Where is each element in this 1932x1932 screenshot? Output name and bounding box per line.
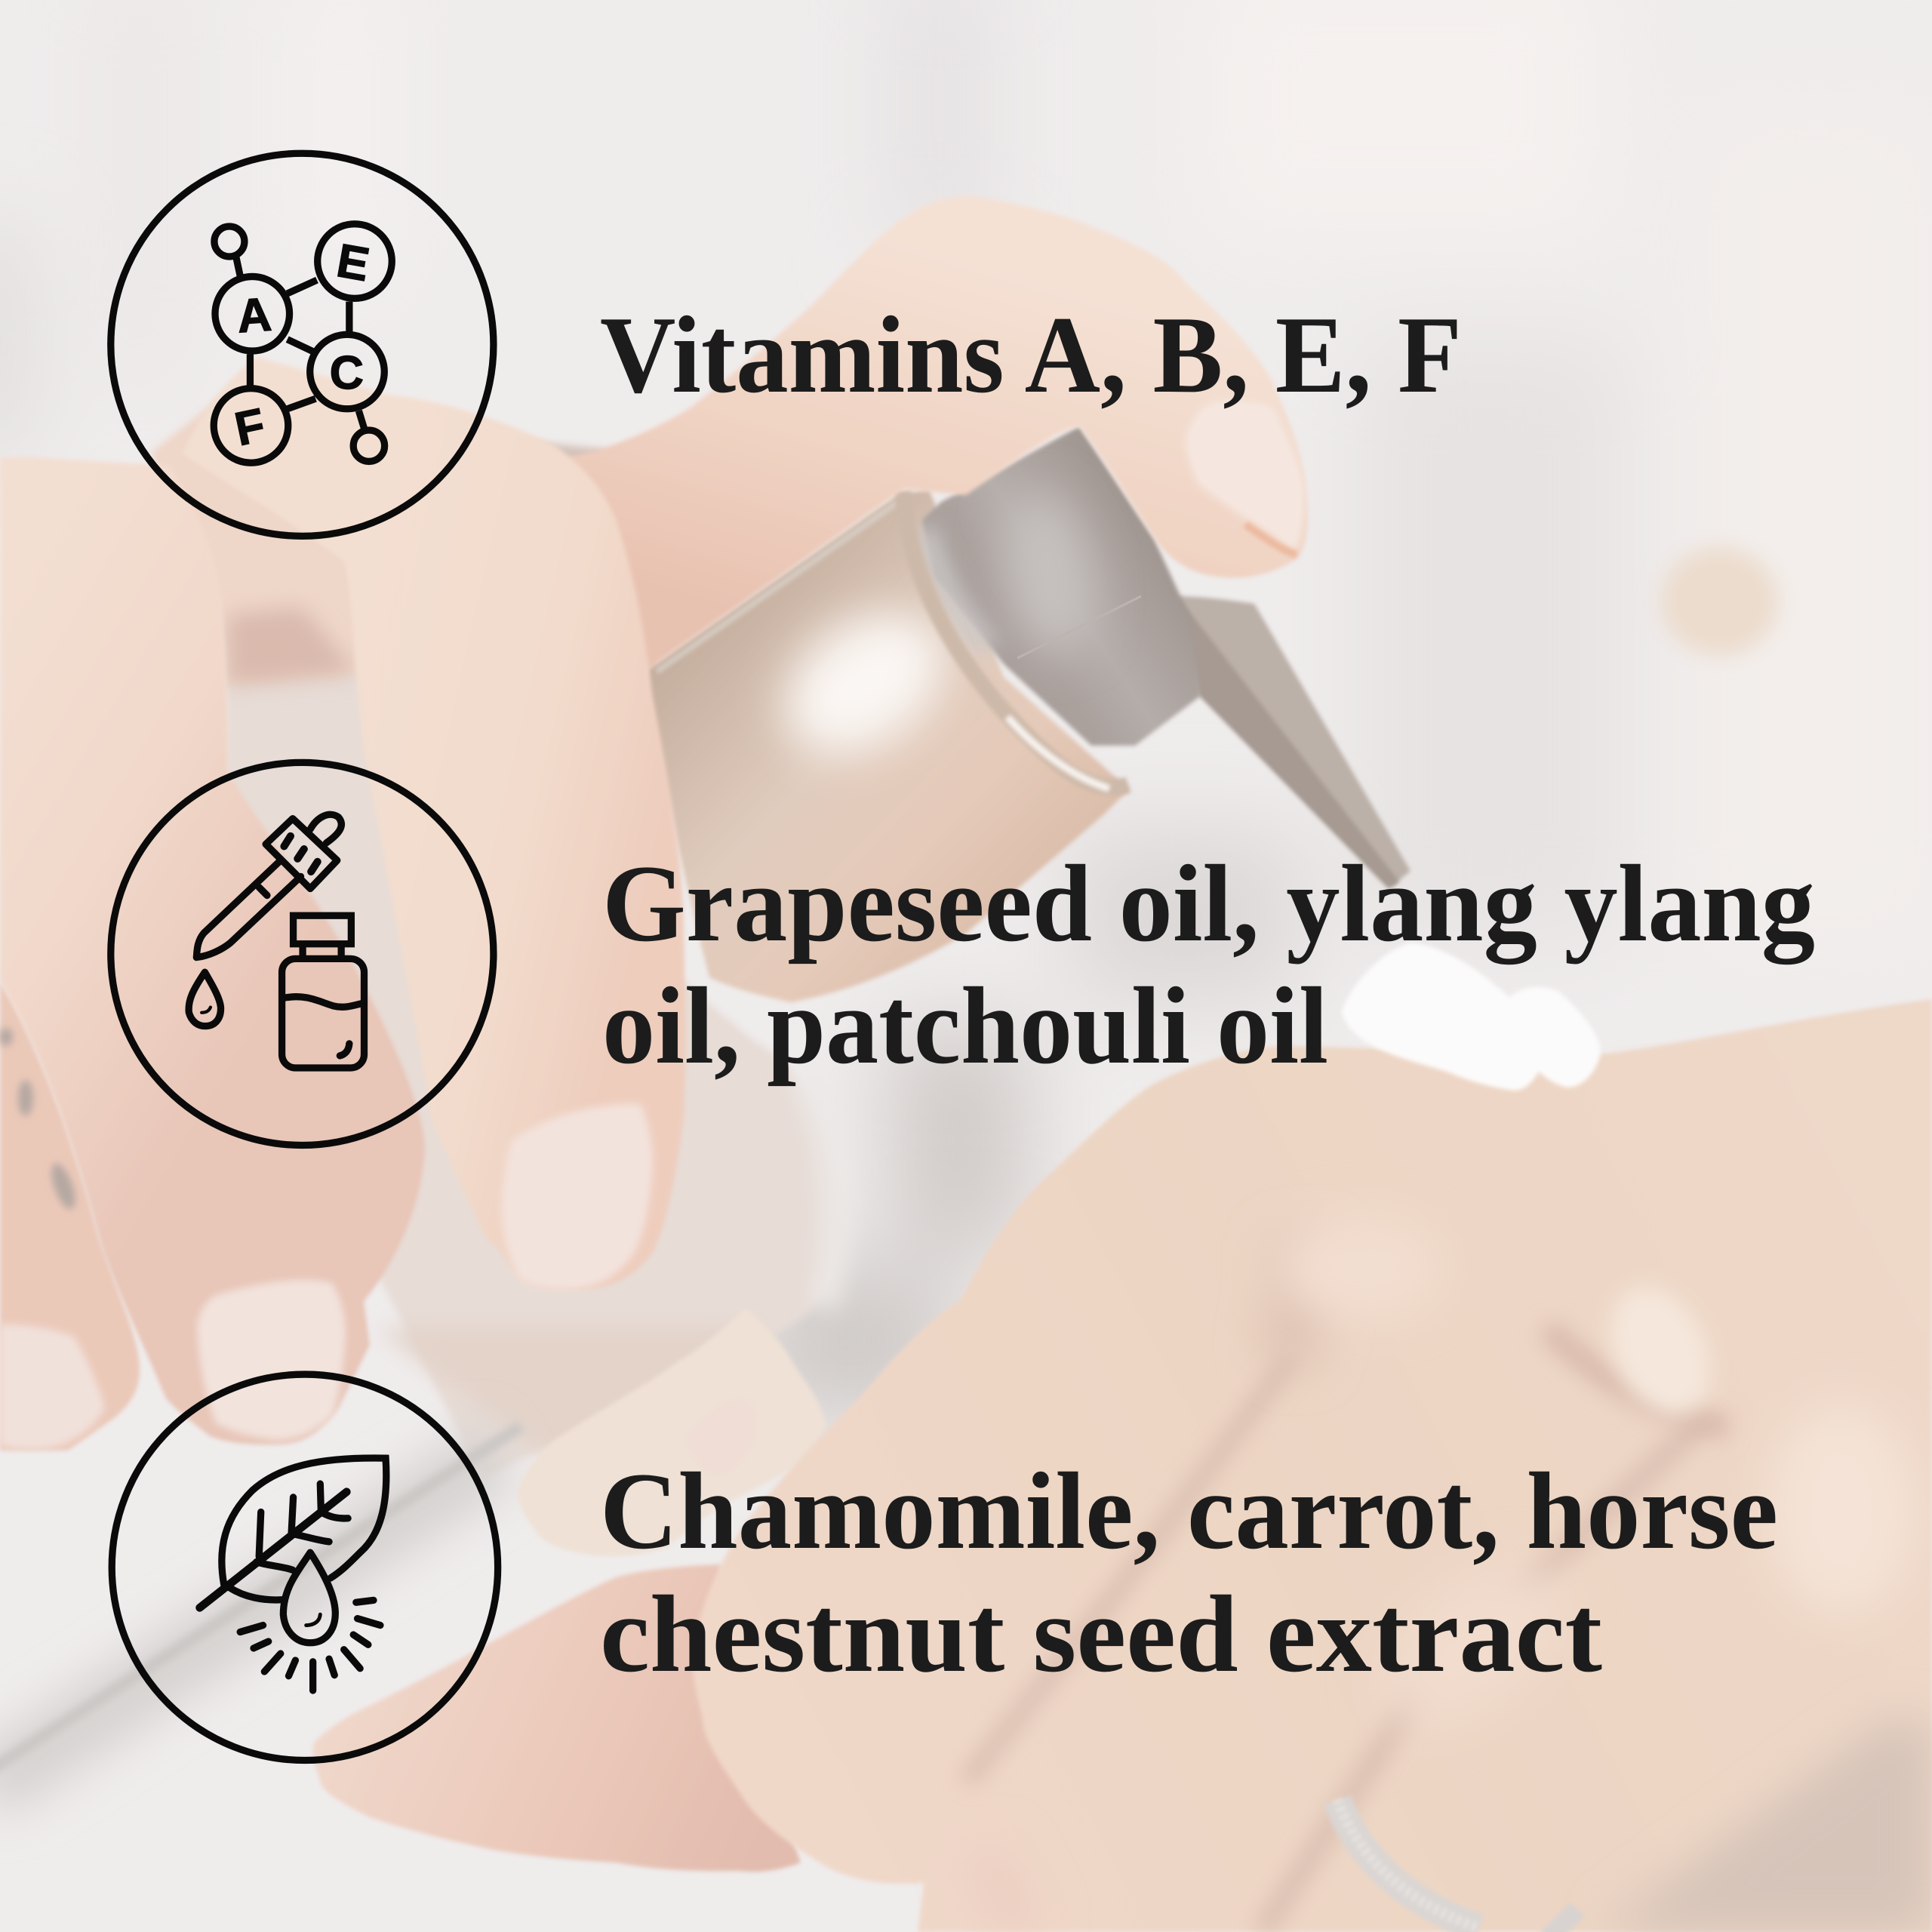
index finger — [0, 457, 425, 1444]
molecule nodes — [214, 224, 392, 463]
drop rays — [240, 1600, 380, 1690]
icon badge: vitamins molecule — [111, 153, 494, 536]
molecule letters: A — [235, 288, 273, 343]
oil bottle — [282, 915, 364, 1068]
text: oils: oil, patchouli oil — [602, 964, 1328, 1087]
middle finger — [182, 357, 685, 1290]
icon badge: dropper and oil bottle — [111, 762, 494, 1145]
oil drop — [189, 972, 221, 1026]
far left finger — [0, 981, 140, 1451]
icon badge: leaf with drop — [112, 1374, 498, 1760]
back of the receiving hand — [693, 999, 1932, 1932]
text: botanical extracts: Chamomile, carrot, horse — [600, 1450, 1778, 1572]
molecule letters: C — [330, 346, 364, 399]
pump cap — [922, 426, 1201, 746]
pen — [0, 1426, 521, 1789]
molecule letters: E — [333, 234, 373, 291]
molecule letters — [230, 234, 373, 456]
clear bottle base — [226, 664, 839, 1479]
far left nail — [0, 1324, 105, 1449]
nozzle — [1177, 596, 1411, 887]
extract drop — [283, 1552, 335, 1643]
badge ring — [112, 1374, 498, 1760]
molecule letters: F — [230, 398, 269, 456]
text: oils — [602, 842, 1815, 1087]
palm shadow — [528, 441, 657, 679]
bottle rim — [903, 491, 1128, 787]
cream — [1342, 943, 1601, 1091]
blurred shirt button — [1660, 547, 1778, 656]
text: botanical extracts: chestnut seed extract — [600, 1573, 1602, 1695]
top finger on pump — [566, 196, 1308, 670]
pump bottle — [647, 426, 1411, 1002]
thumb — [313, 1564, 801, 1872]
left hand fingers — [0, 357, 685, 1451]
lower finger — [518, 1308, 826, 1556]
dropper — [196, 814, 341, 958]
badge ring — [111, 153, 494, 536]
tattoo marks — [0, 1028, 80, 1212]
text: botanical extracts — [600, 1450, 1778, 1695]
ring — [1337, 1800, 1577, 1932]
badge ring — [111, 762, 494, 1145]
bottle body — [647, 489, 1129, 1002]
heading: vitamins: Vitamins A, B, E, F — [600, 294, 1462, 416]
knuckle patch — [151, 392, 377, 685]
text: oils: Grapeseed oil, ylang ylang — [602, 842, 1815, 964]
leaf — [200, 1458, 386, 1607]
